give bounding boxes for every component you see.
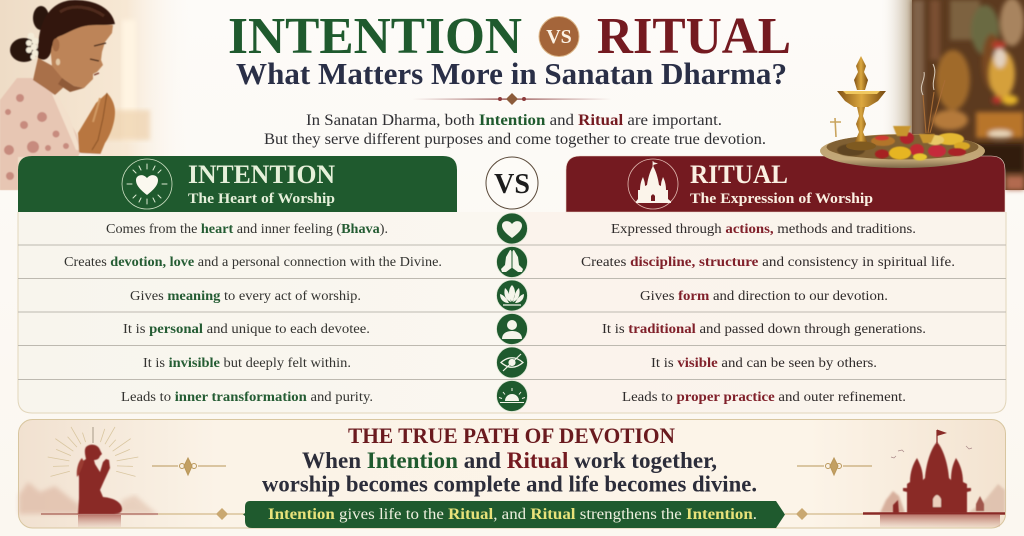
panel header: ritual: RITUAL — [690, 160, 788, 189]
panel header: intention: INTENTION — [188, 160, 335, 189]
icon: rising sun — [496, 380, 528, 412]
right column rows: Gives form and direction to our devotion. — [640, 289, 888, 304]
left column rows: It is invisible but deeply felt within. — [143, 356, 351, 371]
icon: temple — [628, 159, 678, 209]
subtitle: What Matters More in Sanatan Dharma? — [236, 56, 787, 91]
intro text — [264, 112, 766, 148]
left column rows: Leads to inner transformation and purity. — [121, 390, 373, 405]
brass lamp — [837, 56, 886, 150]
right column rows: Expressed through actions, methods and traditions. — [611, 222, 916, 237]
left column rows: Creates devotion, love and a personal connection with the Divine. — [64, 255, 442, 270]
ornament: left flourish — [152, 458, 226, 475]
right column rows — [581, 222, 955, 405]
left column rows: It is personal and unique to each devotee. — [123, 322, 370, 337]
badge: vs — [539, 16, 579, 56]
vs circle: VS — [494, 169, 530, 200]
ornament: right ribbon connector — [785, 508, 866, 520]
photo: altar background — [880, 0, 1024, 190]
vs circle — [486, 157, 538, 209]
intro text: But they serve different purposes and come together to create true devotion. — [264, 131, 766, 148]
icon: person — [496, 314, 528, 344]
incense sticks and smoke — [921, 64, 945, 133]
text: together: worship becomes complete and life becomes divine. — [262, 472, 757, 496]
small ornament — [830, 118, 841, 137]
comparison table background — [18, 212, 1006, 413]
intro text: In Sanatan Dharma, both Intention and Ritual are important. — [306, 112, 722, 129]
title: RITUAL — [597, 8, 791, 65]
panel header: ritual: The Expression of Worship — [690, 191, 873, 207]
left column rows: Gives meaning to every act of worship. — [130, 289, 361, 304]
ornament divider — [412, 93, 612, 105]
right column rows: It is traditional and passed down through generations. — [602, 322, 926, 337]
title — [228, 8, 791, 65]
icon: crossed eye — [496, 347, 528, 378]
photo: lamp, incense and offering plate — [820, 56, 985, 168]
text: together — [262, 448, 757, 496]
text: together: When Intention and Ritual work together, — [302, 448, 717, 473]
photo: woman praying — [0, 0, 195, 190]
illustration: temple silhouette — [863, 430, 1005, 527]
panel: true path banner — [18, 420, 1006, 528]
illustration: kneeling devotee — [19, 427, 158, 527]
right column rows: Creates discipline, structure and consistency in spiritual life. — [581, 255, 955, 270]
ribbon: summary: Intention gives life to the Ritual, and Ritual strengthens the Intention. — [268, 506, 757, 523]
icon: praying hands — [496, 246, 528, 278]
ornament: right flourish — [797, 458, 872, 475]
icon: heart — [496, 213, 528, 244]
plate — [820, 134, 985, 168]
panel header: ritual — [566, 156, 1005, 212]
ornament: left ribbon connector — [158, 508, 245, 520]
left column rows: Comes from the heart and inner feeling (Bhava). — [106, 222, 388, 237]
right column rows: It is visible and can be seen by others. — [651, 356, 877, 371]
icon: lotus — [496, 280, 528, 311]
ribbon: summary — [243, 501, 785, 528]
title: INTENTION — [228, 8, 522, 65]
panel header: intention: The Heart of Worship — [188, 191, 335, 207]
icon: radiant heart — [122, 159, 172, 209]
panel header: intention — [18, 156, 457, 212]
heading: the true path: THE TRUE PATH OF DEVOTION — [348, 423, 675, 448]
left column rows — [64, 222, 442, 405]
badge: vs: VS — [546, 26, 572, 48]
right column rows: Leads to proper practice and outer refinement. — [622, 390, 906, 405]
